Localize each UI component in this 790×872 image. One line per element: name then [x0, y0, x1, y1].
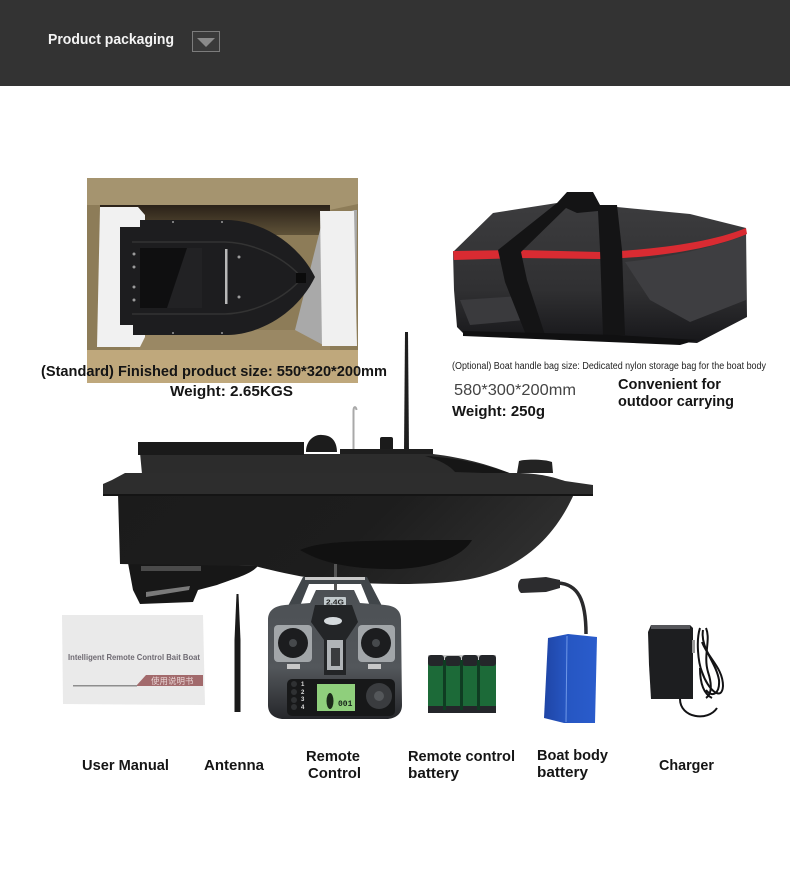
- hook: [354, 407, 356, 452]
- photo: nylon storage bag: [453, 192, 747, 345]
- hull: [118, 494, 574, 584]
- icon: boat body battery: [518, 577, 597, 723]
- icon: remote control: 001: [338, 700, 353, 709]
- label: remote control: Remote: [306, 748, 360, 765]
- heading: Product packaging: Product packaging: [48, 31, 174, 48]
- label: remote control battery: [408, 748, 515, 782]
- label: boat body battery: battery: [537, 764, 589, 781]
- boat: [103, 332, 593, 604]
- header band: [0, 0, 790, 86]
- icon: dropdown arrow: [192, 32, 220, 52]
- label: remote control: [306, 748, 361, 782]
- icon: remote control: 2.4G: [326, 600, 345, 606]
- label: remote control battery: Remote control: [408, 748, 515, 765]
- joysticks: [274, 625, 395, 662]
- label: charger: Charger: [659, 757, 714, 774]
- icon: remote control: [268, 564, 402, 719]
- label: boat body battery: Boat body: [537, 747, 609, 764]
- label: remote control: Control: [308, 765, 361, 782]
- icon: remote control batteries: [428, 655, 496, 713]
- flange: [103, 473, 593, 496]
- icon: user manual: Intelligent Remote Control Bait Boat: [68, 653, 200, 662]
- photo: boat in carton: [87, 178, 358, 383]
- label: remote control battery: battery: [408, 765, 460, 782]
- caption: convenience note: outdoor carrying: [618, 393, 734, 410]
- caption: bag dimensions: 580*300*200mm: [454, 382, 576, 399]
- icon: remote control: 1: [301, 682, 305, 688]
- icon: remote control: 2: [301, 690, 305, 696]
- label: boat body battery: [537, 747, 609, 781]
- caption: standard product size: (Standard) Finished product size: 550*320*200mm: [41, 363, 387, 380]
- label: user manual: User Manual: [82, 757, 169, 774]
- icon: user manual: [62, 615, 205, 705]
- zipper: [453, 228, 747, 260]
- icon: remote control: 4: [301, 705, 305, 711]
- caption: convenience note: [618, 376, 734, 410]
- deck: [139, 442, 512, 474]
- icon: user manual: 使用说明书: [151, 676, 194, 686]
- carrying straps: [498, 192, 625, 335]
- caption: bag weight: Weight: 250g: [452, 403, 545, 420]
- LCD: [317, 684, 355, 711]
- control panel: [287, 679, 395, 716]
- icon: remote control: 3: [301, 697, 305, 703]
- caption: convenience note: Convenient for: [618, 376, 721, 393]
- motor frame: [128, 563, 258, 604]
- caption: standard weight: Weight: 2.65KGS: [170, 383, 293, 400]
- label: antenna: Antenna: [204, 757, 265, 774]
- icon: antenna: [234, 594, 240, 712]
- icon: charger: [648, 625, 723, 716]
- antenna: [404, 332, 409, 452]
